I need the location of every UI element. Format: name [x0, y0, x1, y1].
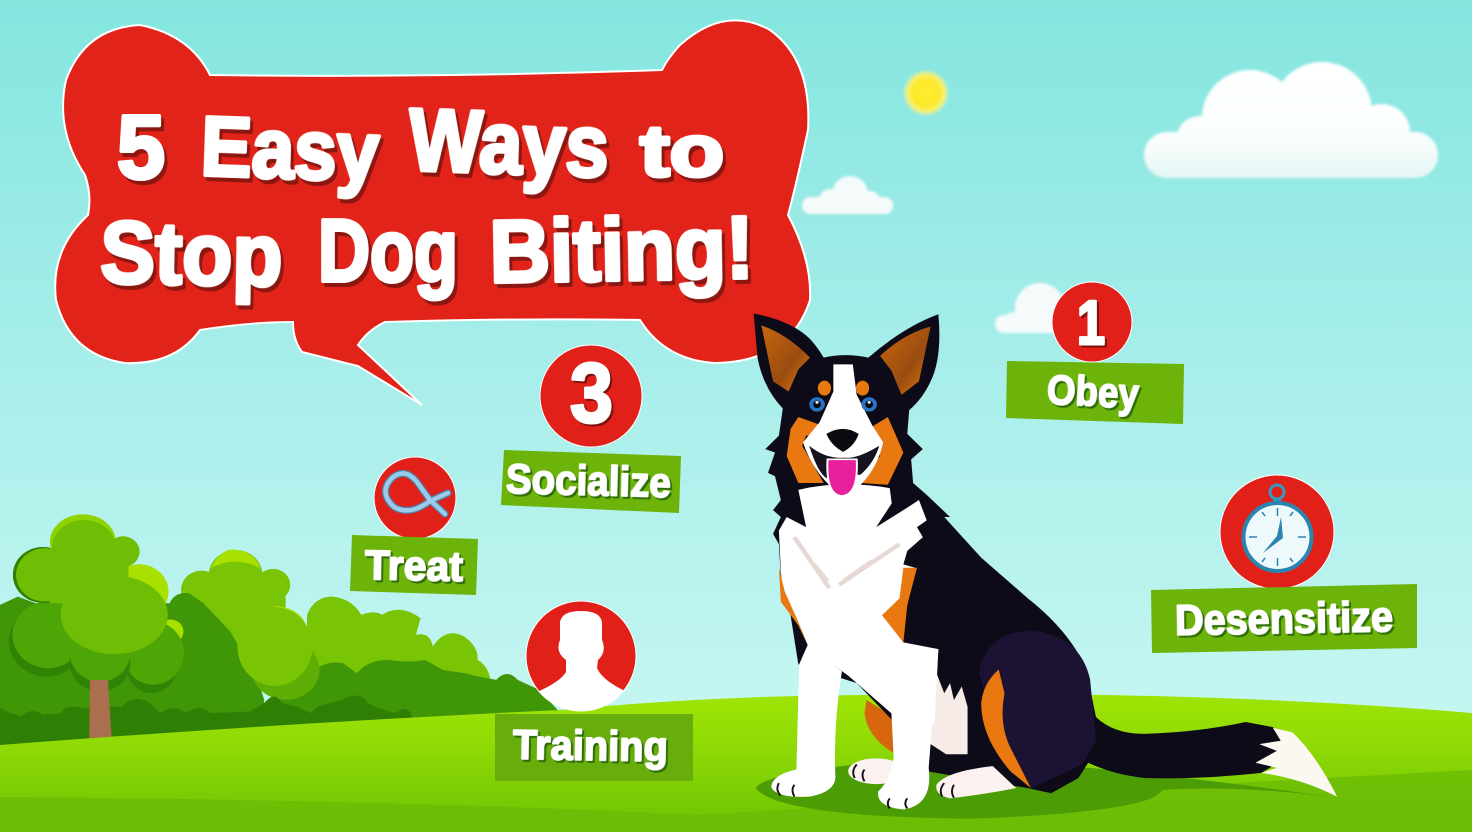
icon: stopwatch	[1244, 485, 1312, 571]
label panel obey	[1006, 361, 1184, 424]
rear paw	[848, 758, 904, 784]
large cloud	[1144, 62, 1438, 178]
number 1: 1	[1077, 289, 1105, 358]
step: treat	[350, 457, 478, 595]
left foreleg	[771, 644, 842, 797]
black body	[754, 314, 1292, 793]
belly patch	[927, 673, 968, 754]
title: Dog	[318, 201, 458, 300]
step: training	[495, 601, 693, 781]
tree trunk	[89, 680, 112, 739]
back bush right	[261, 660, 560, 733]
ears	[761, 325, 810, 392]
sun	[902, 69, 950, 117]
step: desensitize	[1151, 475, 1417, 653]
front dark bushes	[0, 696, 412, 753]
bushes and tree	[0, 514, 560, 753]
right foreleg	[878, 642, 938, 810]
orange belly	[864, 700, 899, 756]
mouth	[809, 446, 879, 478]
light bush lower	[252, 640, 320, 700]
title: Stop	[100, 202, 283, 305]
label panel desensitize	[1151, 584, 1417, 653]
muzzle blaze	[803, 364, 883, 498]
badge with ribbon icon	[374, 457, 456, 539]
back bush left	[0, 593, 264, 753]
light bush right	[307, 597, 491, 713]
ground hill	[0, 694, 1472, 832]
bush highlight	[211, 550, 308, 633]
title: 5	[117, 98, 165, 198]
number badge 3	[540, 345, 642, 447]
light bush upper	[181, 550, 290, 647]
eyes	[809, 397, 877, 412]
title bone speech bubble	[55, 20, 810, 405]
nose	[826, 429, 859, 452]
label desensitize: Desensitize	[1175, 593, 1393, 645]
number badge 1	[1052, 282, 1132, 362]
dog	[754, 314, 1339, 819]
number 3: 3	[570, 346, 613, 440]
icon: ribbon treat	[385, 473, 448, 514]
label panel training	[495, 714, 693, 781]
title: Ways	[407, 90, 611, 196]
icon: person silhouette	[539, 611, 624, 710]
label treat: Treat	[365, 541, 463, 590]
dog shadow	[756, 764, 1339, 819]
haunch	[979, 631, 1096, 788]
step 3: socialize	[501, 345, 681, 513]
title	[100, 90, 754, 305]
badge with person icon	[526, 601, 636, 711]
label training: Training	[513, 721, 668, 770]
label obey: Obey	[1046, 366, 1141, 417]
label panel treat	[350, 535, 478, 595]
tongue	[827, 459, 857, 496]
lower ground shade	[0, 770, 1472, 832]
toes	[777, 764, 954, 808]
small cloud	[802, 176, 893, 214]
step 1: obey	[1006, 282, 1184, 424]
orange leg stripe	[981, 670, 1031, 788]
badge with stopwatch	[1220, 475, 1334, 589]
eyebrows	[818, 381, 831, 396]
cheeks	[787, 417, 824, 483]
title: Easy	[199, 99, 381, 199]
label panel socialize	[501, 450, 681, 513]
label socialize: Socialize	[505, 455, 672, 506]
tail tip	[1255, 728, 1337, 797]
cloud behind number 1	[995, 283, 1085, 333]
orange chest sides	[779, 568, 917, 646]
hind paw	[936, 766, 1016, 798]
chest fur	[779, 484, 938, 724]
title: to	[640, 112, 724, 192]
chest shading	[794, 537, 899, 588]
tree crown	[9, 514, 184, 693]
title: Biting!	[489, 198, 754, 301]
